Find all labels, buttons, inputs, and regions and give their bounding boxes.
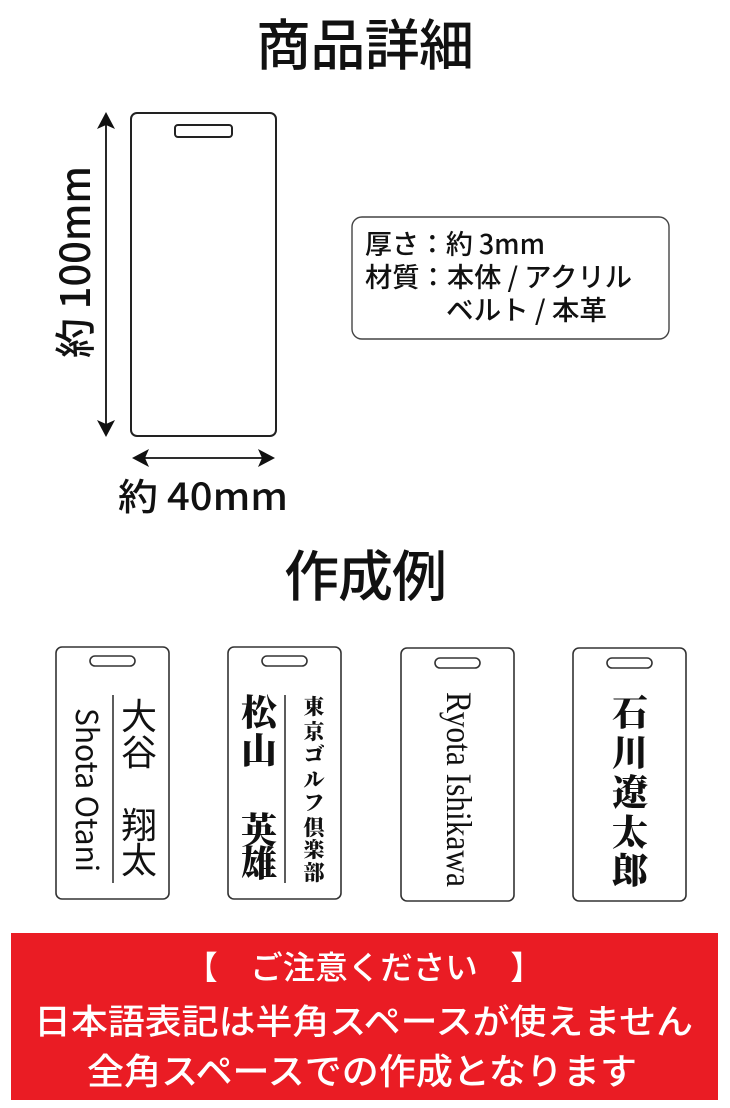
example tag 2: 東 xyxy=(304,691,324,721)
example tag 4: 遼 xyxy=(612,765,649,816)
example tag 2: ゴ xyxy=(304,739,324,769)
example tag 3: Ryota Ishikawa xyxy=(439,692,479,887)
example tag 2: 山 xyxy=(241,723,277,774)
spec: material belt: ベルト / 本革 xyxy=(446,289,607,328)
example tag 1: Shota Otani xyxy=(67,708,111,872)
title: examples: 作成例 xyxy=(284,532,447,612)
example tag 2: 倶 xyxy=(304,812,326,842)
spec: material body: 材質：本体 / アクリル xyxy=(365,256,632,295)
example tag 4: 石 xyxy=(612,685,648,736)
example tag 2: 松 xyxy=(241,685,281,736)
diagram: tag dimensions xyxy=(42,112,288,521)
label: width: 約 40mm xyxy=(118,467,288,521)
example tag 2: 京 xyxy=(304,716,326,746)
example tag 2: 部 xyxy=(304,857,324,887)
example tag 1: 谷 xyxy=(121,724,157,776)
example tag 2: 英 xyxy=(241,803,277,854)
callout: notice xyxy=(11,933,718,1100)
title: product details: 商品詳細 xyxy=(256,1,474,81)
example tag 4: 太 xyxy=(612,805,648,856)
notice line 1: 日本語表記は半角スペースが使えません xyxy=(34,994,693,1044)
example tag 1: 太 xyxy=(121,832,157,884)
example tag 1 xyxy=(56,647,169,899)
arrow: height xyxy=(97,112,115,437)
example tag 1: 翔 xyxy=(121,797,157,849)
example tag 2: フ xyxy=(304,787,324,817)
example tag 2: 雄 xyxy=(241,836,277,887)
label: height: 約 100mm xyxy=(42,166,102,358)
spec: thickness: 厚さ：約 3mm xyxy=(365,223,545,262)
example tag 2 xyxy=(228,647,341,899)
notice heading: 【 ご注意ください 】 xyxy=(185,942,543,989)
example tag 2: ル xyxy=(304,764,324,794)
example tag 3 xyxy=(401,648,514,901)
panel: specifications xyxy=(352,217,669,339)
notice line 2: 全角スペースでの作成となります xyxy=(87,1043,637,1095)
example tag 4: 郎 xyxy=(612,843,648,894)
example tag 1: 大 xyxy=(121,688,157,740)
tag outline large xyxy=(131,113,276,436)
arrow: width xyxy=(132,449,275,467)
example tag 4 xyxy=(573,648,686,901)
example tag 2: 楽 xyxy=(304,834,326,864)
example tag 4: 川 xyxy=(612,725,648,776)
